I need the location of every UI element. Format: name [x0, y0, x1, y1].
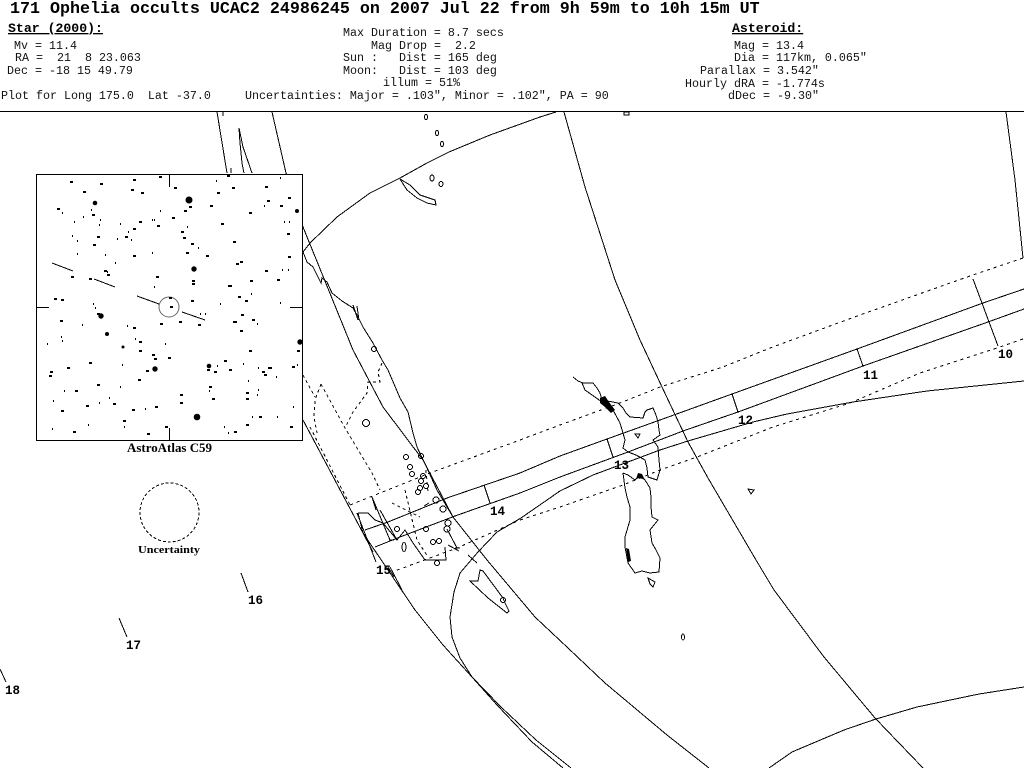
dashed path limits: [350, 258, 1023, 505]
inset caption: AstroAtlas C59: [127, 441, 212, 455]
hourly dRA: Hourly dRA = -1.774s: [685, 77, 825, 91]
coast: New Caledonia: [400, 179, 436, 205]
hour labels: 11: [863, 369, 878, 383]
bright stars: [93, 196, 303, 420]
path limit curves: [217, 112, 709, 768]
moon illumination: illum = 51%: [383, 76, 460, 90]
magnitude drop: Mag Drop = 2.2: [371, 39, 476, 53]
central track lines: [365, 289, 1024, 530]
asteroid diameter: Dia = 117km, 0.065": [734, 51, 867, 65]
inset frame: [36, 174, 302, 440]
hour labels: 10: [998, 348, 1013, 362]
small islands and circles: [362, 112, 684, 640]
star declination: Dec = -18 15 49.79: [7, 64, 133, 78]
coast: New Zealand south island: [623, 473, 660, 573]
moon distance: Moon: Dist = 103 deg: [343, 64, 497, 78]
track segments: [52, 263, 205, 320]
hour labels: 18: [5, 684, 20, 698]
title: 171 Ophelia occults UCAC2 24986245 on 2007 Jul 22 from 9h 59m to 10h 15m UT: [10, 0, 760, 19]
coast: small New Zealand islands: [635, 434, 754, 587]
crosshair ticks: [36, 174, 302, 440]
heading: star: Star (2000):: [8, 21, 103, 36]
hour labels: 16: [248, 594, 263, 608]
faint stars: [47, 176, 299, 435]
panel: asteroid data: [685, 21, 867, 103]
heading: asteroid: Asteroid:: [732, 21, 803, 36]
hour labels: 14: [490, 505, 506, 519]
plot location: Plot for Long 175.0 Lat -37.0: [1, 89, 211, 103]
star magnitude: Mv = 11.4: [14, 39, 77, 53]
target circle: [159, 297, 179, 317]
sun distance: Sun : Dist = 165 deg: [343, 51, 497, 65]
parallax: Parallax = 3.542": [700, 64, 819, 78]
dashed borders: [303, 363, 428, 557]
hour labels: 15: [376, 564, 391, 578]
panel: event data: [245, 26, 609, 103]
coast: eastern Australia: [231, 128, 453, 517]
uncertainties: Uncertainties: Major = .103", Minor = .102", PA = 90: [245, 89, 609, 103]
coast: New Zealand north island: [573, 377, 660, 480]
hour labels: 12: [738, 414, 753, 428]
star chart inset: [36, 174, 303, 440]
coast: Tasmania and Bass region: [358, 497, 459, 590]
dDec: dDec = -9.30": [728, 89, 819, 103]
island: south of Tasman arc: [470, 570, 509, 613]
max duration: Max Duration = 8.7 secs: [343, 26, 504, 40]
hour labels: 17: [126, 639, 141, 653]
star right ascension: RA = 21 8 23.063: [15, 51, 141, 65]
time ticks: [0, 279, 998, 682]
asteroid magnitude: Mag = 13.4: [734, 39, 804, 53]
hour labels: [5, 348, 1013, 698]
uncertainty label: Uncertainty: [138, 544, 201, 556]
uncertainty ellipse: [140, 483, 199, 542]
panel: star data: [7, 21, 141, 78]
hour labels: 13: [614, 459, 629, 473]
